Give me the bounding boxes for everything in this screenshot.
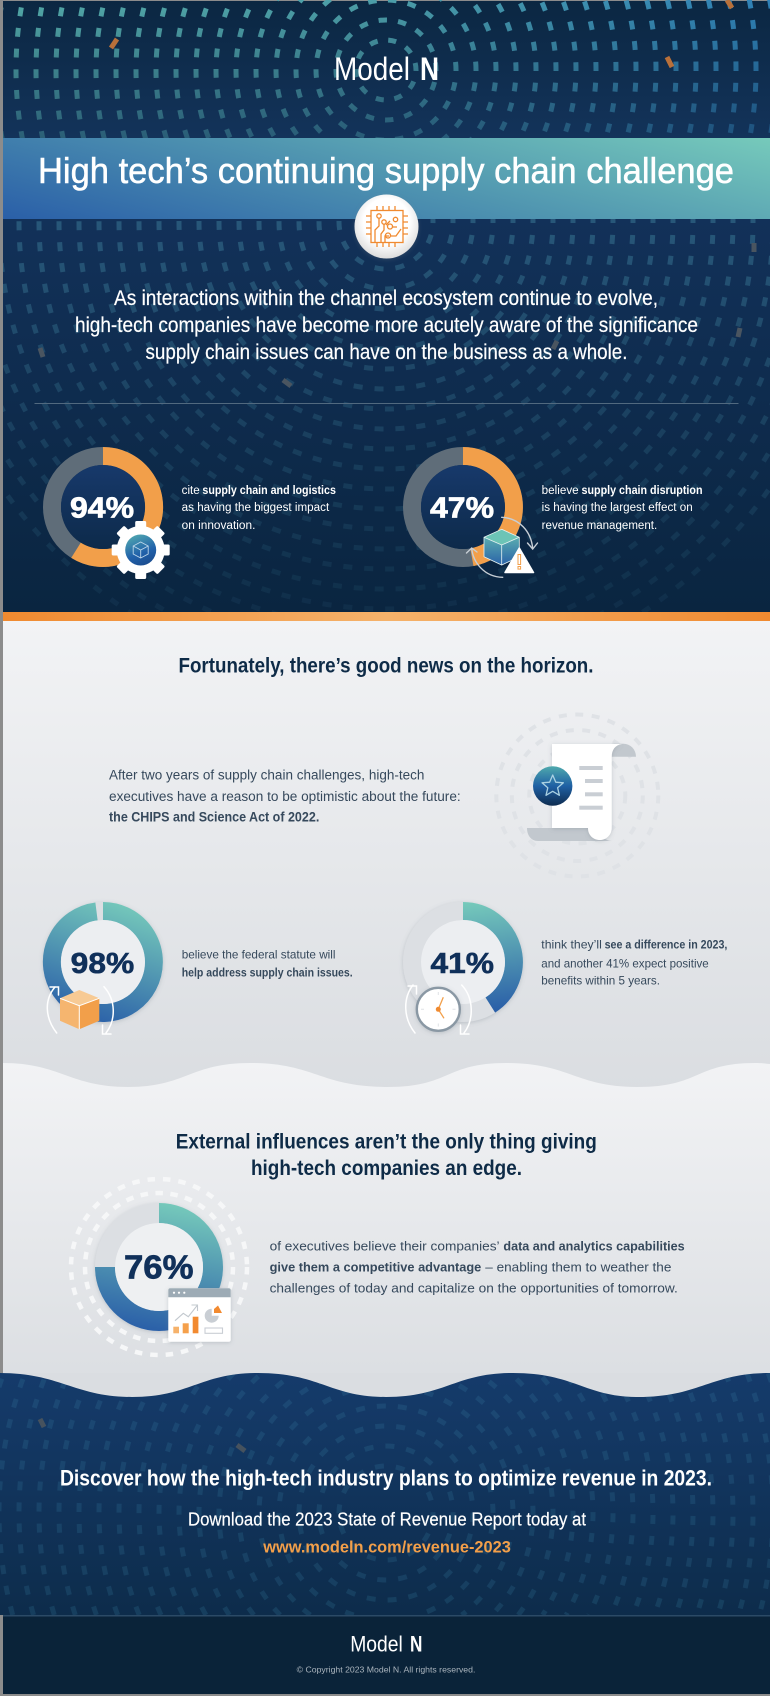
text block: 76% caption: challenges of today and capitalize on the opportunities of tomorrow. [270, 1282, 678, 1296]
text block: 76% caption: of executives believe their companies’ [270, 1240, 500, 1254]
panel: competitive edge section with wave top [3, 1063, 770, 1400]
text block: 94% caption: on innovation. [182, 520, 255, 532]
text block: copyright: © Copyright 2023 Model N. All rights reserved. [297, 1665, 475, 1675]
divider [34, 403, 738, 404]
text block: 41% caption: benefits within 5 years. [541, 973, 660, 987]
title banner [3, 138, 770, 219]
text block: 47% caption: revenue management. [542, 520, 657, 532]
text block: CHIPS act: executives have a reason to be optimistic about the future: [109, 789, 461, 804]
chart: 41% donut [412, 911, 514, 1013]
text block: 94% caption: as having the biggest impact [182, 502, 330, 514]
panel: call to action with wave top [0, 1373, 770, 1615]
text block: 47% caption [542, 485, 702, 532]
chart: 76% donut with dashed rings: 76% [124, 1248, 194, 1286]
chart: 47% donut [412, 456, 514, 558]
text block: intro paragraph: As interactions within the channel ecosystem continue to evolve, [114, 287, 658, 310]
logo: Model N footer: N [410, 1632, 422, 1657]
heading: good news: Fortunately, there’s good news on the horizon. [178, 654, 594, 678]
text block: 76% caption: data and analytics capabilities [503, 1240, 685, 1254]
text block: 94% caption: supply chain and logistics [202, 485, 336, 497]
icon: analytics window [168, 1288, 231, 1342]
icon: legal scroll with star badge [496, 714, 658, 876]
text block: CHIPS act: After two years of supply chain challenges, high-tech [109, 767, 424, 782]
icon: clock with arrows [406, 985, 471, 1034]
text block: 98% caption: help address supply chain issues. [182, 966, 353, 980]
text block: 47% caption: believe [542, 485, 579, 497]
orange divider bar [3, 612, 770, 621]
text block: 76% caption: give them a competitive advantage [270, 1261, 481, 1275]
panel: good news section [3, 621, 770, 1091]
panel: dark header with dashed rings [3, 0, 770, 138]
text block: CHIPS act [109, 767, 461, 825]
logo: Model N header: Model [334, 51, 410, 87]
heading: external influences: External influences aren’t the only thing giving [176, 1130, 597, 1153]
chart: 98% donut [52, 911, 154, 1013]
text block: 76% caption: – enabling them to weather the [485, 1261, 671, 1275]
text block: 41% caption: see a difference in 2023, [605, 938, 727, 952]
logo: Model N header: N [420, 51, 439, 87]
text block: 41% caption [541, 938, 727, 987]
text block: CHIPS act: the CHIPS and Science Act of 2022. [109, 810, 319, 825]
icon: circuit chip in white disc [354, 194, 418, 258]
chart: 76% donut with dashed rings [71, 1179, 247, 1355]
panel: intro dark section [3, 219, 770, 612]
logo: Model N footer: Model [350, 1632, 403, 1657]
text block: 98% caption [182, 947, 353, 980]
icon: orange cube with arrows [47, 987, 113, 1034]
chart: 47% donut: 47% [430, 492, 494, 524]
title: High tech’s continuing supply chain challenge [38, 150, 734, 191]
text block: 41% caption: think they’ll [541, 938, 602, 952]
panel: footer [3, 1615, 770, 1694]
icon: cube with warning and arrows [466, 517, 538, 577]
heading: external influences [176, 1130, 597, 1180]
text block: 98% caption: believe the federal statute will [182, 947, 336, 961]
icon: gear with cube [112, 521, 170, 579]
text block: intro paragraph [75, 287, 698, 364]
text block: download prompt: Download the 2023 State of Revenue Report today at [188, 1509, 586, 1530]
text block: intro paragraph: supply chain issues can have on the business as a whole. [146, 341, 628, 364]
link: report url: www.modeln.com/revenue-2023 [262, 1538, 511, 1557]
text block: 47% caption: is having the largest effect on [542, 502, 693, 514]
chart: 94% donut: 94% [70, 492, 134, 524]
heading: external influences: high-tech companies an edge. [251, 1157, 522, 1180]
text block: 94% caption: cite [182, 485, 200, 497]
text block: 76% caption [270, 1240, 685, 1296]
chart: 98% donut: 98% [71, 948, 134, 980]
text block: 94% caption [182, 485, 336, 532]
chart: 41% donut: 41% [430, 948, 494, 980]
text block: 47% caption: supply chain disruption [582, 485, 702, 497]
chart: 94% donut [52, 456, 154, 558]
text block: intro paragraph: high-tech companies have become more acutely aware of the significance [75, 314, 698, 337]
text block: 41% caption: and another 41% expect positive [541, 956, 709, 970]
